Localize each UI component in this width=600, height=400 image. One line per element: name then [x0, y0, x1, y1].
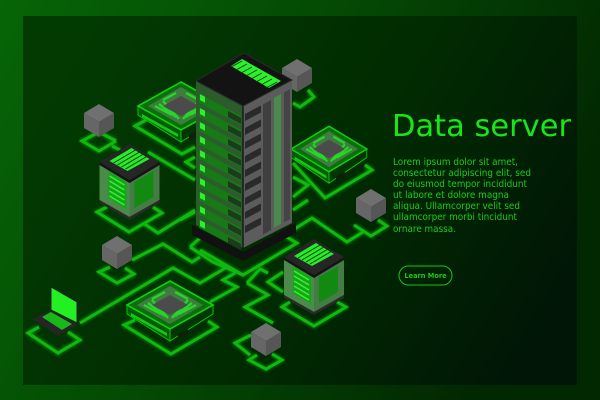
tower right face: [243, 80, 292, 248]
title: Data server: [392, 109, 571, 144]
tower top: [196, 53, 292, 106]
button: learn more: [399, 266, 452, 285]
icon: processor chip top left: [138, 82, 224, 142]
circuit traces glow: [28, 90, 387, 369]
body text: Lorem ipsum dolor sit amet,: [393, 157, 518, 168]
icon: cube right: [356, 189, 386, 222]
icon: cube left lower: [102, 236, 132, 269]
icon: server unit left: [100, 144, 160, 220]
body text: ullamcorper morbi tincidunt: [393, 212, 517, 223]
tower base: [192, 223, 296, 261]
icon: processor chip bottom: [127, 281, 213, 341]
icon: server unit right: [284, 239, 344, 315]
icon: cube top right: [282, 59, 312, 92]
body text: do eiusmod tempor incididunt: [393, 179, 527, 190]
circuit traces: [28, 90, 387, 369]
tower top vent: [231, 59, 281, 88]
body text: [393, 157, 531, 235]
main server tower: [192, 53, 296, 261]
body text: ut labore et dolore magna: [393, 190, 509, 201]
body text: ornare massa.: [393, 224, 456, 235]
icon: cube bottom: [251, 323, 281, 356]
body text: aliqua. Ullamcorper velit sed: [393, 201, 520, 212]
button: learn more: Learn More: [404, 272, 447, 280]
icon: processor chip right: [291, 126, 367, 183]
icon: laptop: [32, 287, 78, 336]
tower left face: [196, 81, 243, 248]
body text: consectetur adipiscing elit, sed: [393, 168, 531, 179]
icon: cube top left: [84, 104, 114, 137]
